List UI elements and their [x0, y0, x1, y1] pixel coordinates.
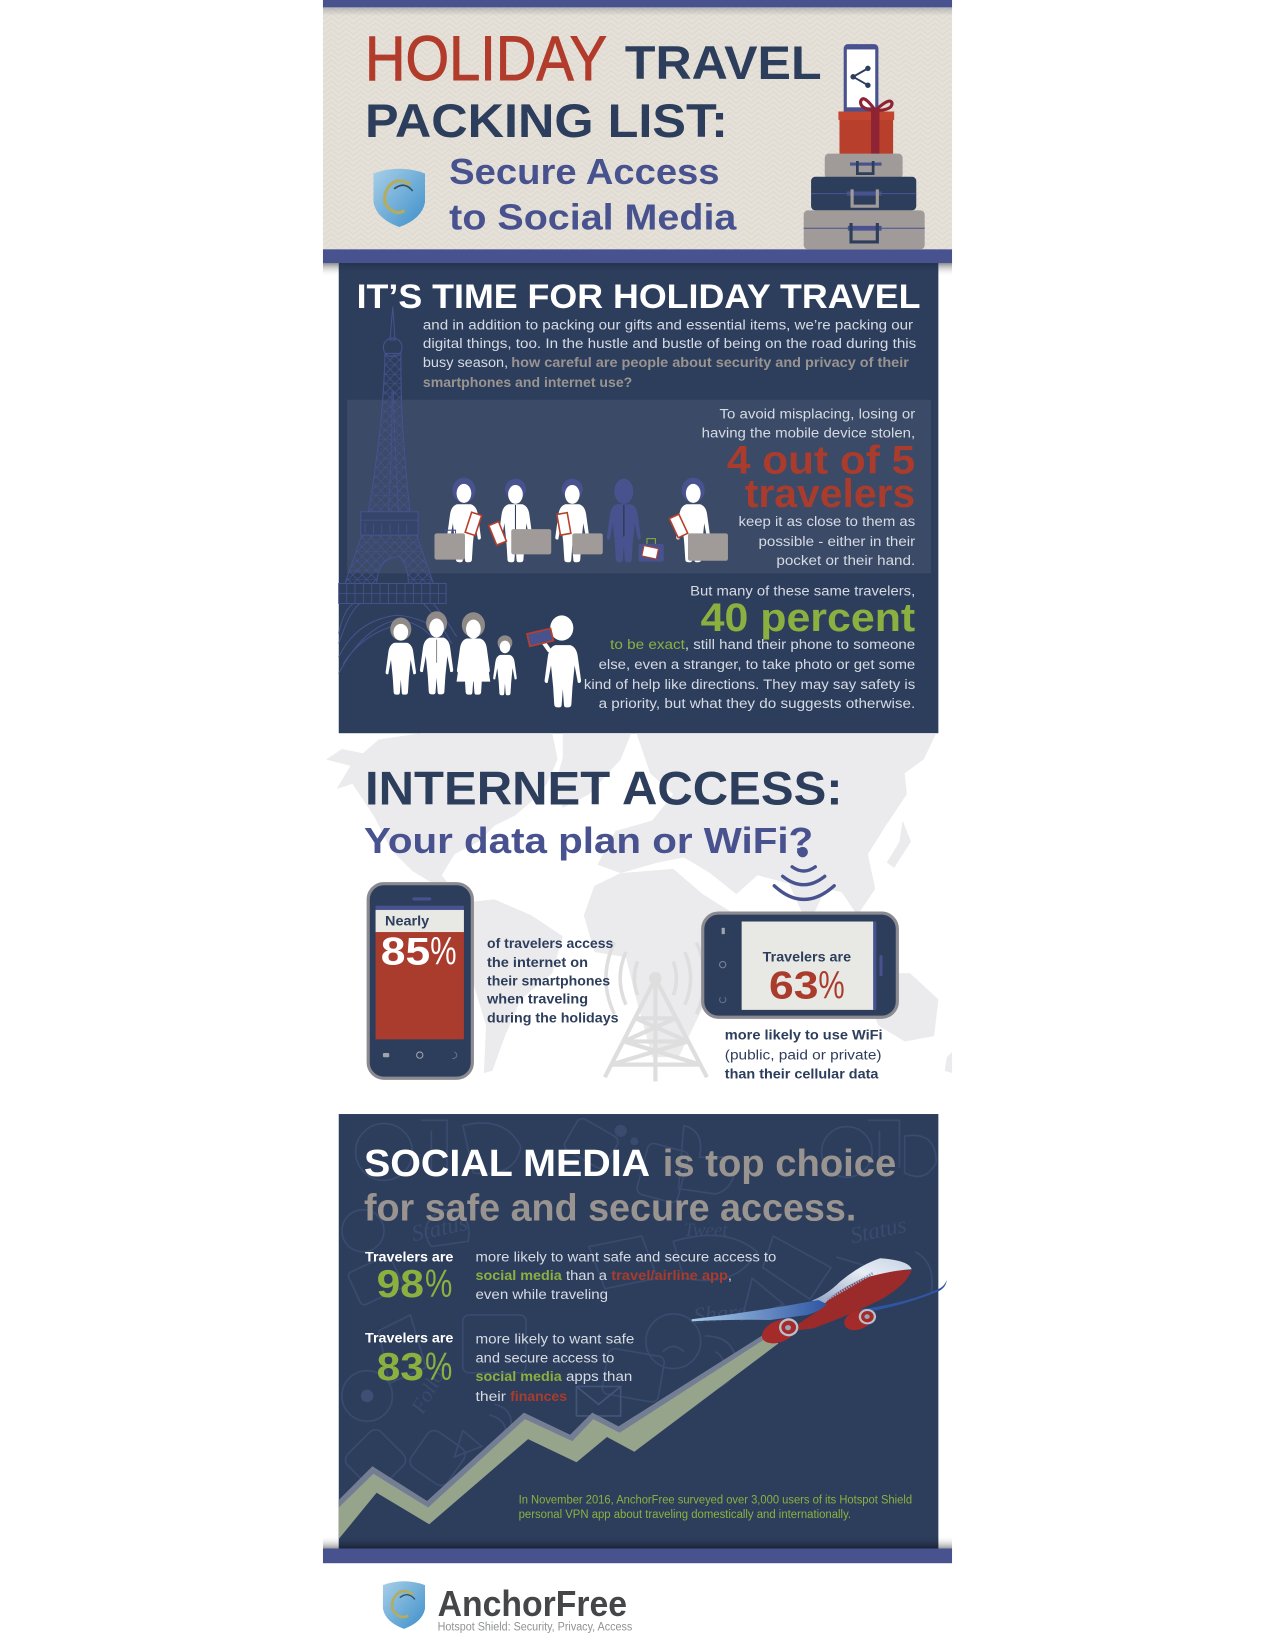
- heading: social media: for safe and secure access.: [364, 1187, 856, 1229]
- text: 4 out of 5 travelers: possible - either in their: [758, 533, 916, 549]
- text: 40 percent: a priority, but what they do suggests otherwise.: [599, 695, 915, 711]
- stat: 98%: than a: [566, 1267, 607, 1283]
- footer band: [323, 1548, 952, 1563]
- icon: wifi signal: [774, 847, 834, 899]
- text: 85 percent description: [486, 935, 619, 1026]
- text: 40 percent: else, even a stranger, to take photo or get some: [599, 656, 916, 672]
- title: holiday travel packing list: [365, 24, 822, 148]
- arrow trail of plane: [339, 1336, 778, 1539]
- world map background: [326, 733, 952, 1073]
- intro text: and in addition to packing our gifts and essential items, we’re packing our: [423, 316, 914, 332]
- stat: 98%: more likely to want safe and secure access to: [475, 1248, 777, 1264]
- stat: 98%: 98: [377, 1263, 424, 1306]
- text: 85 percent description: of travelers access: [487, 935, 614, 951]
- icon: family and person with phone: [386, 611, 581, 707]
- text: 4 out of 5 travelers: 4 out of 5: [727, 438, 915, 482]
- doodle words: Follow: [406, 1353, 455, 1418]
- icon: five travelers with luggage: [434, 478, 728, 562]
- stat: 83%: finances: [510, 1388, 567, 1404]
- text: 4 out of 5 travelers: keep it as close to them as: [738, 513, 915, 529]
- panel: it's time for holiday travel: [339, 263, 938, 733]
- icon: cell tower: [605, 943, 707, 1081]
- text: 40 percent: [584, 582, 916, 711]
- survey note: personal VPN app about traveling domestically and internationally.: [519, 1509, 851, 1521]
- shadows under the header band: [323, 263, 952, 277]
- text: 40 percent: to be exact: [610, 636, 685, 652]
- heading: social media: is top choice: [663, 1143, 896, 1185]
- subheading: Your data plan or WiFi?: [364, 821, 813, 861]
- stat: 83%: apps than: [566, 1368, 632, 1384]
- text: 63 percent description: than their cellular data: [725, 1065, 879, 1081]
- icon: portrait phone 85%: 85: [381, 931, 430, 974]
- stat: 83%: their: [475, 1388, 506, 1404]
- header panel: [323, 0, 952, 263]
- intro text: [423, 316, 916, 390]
- survey note: In November 2016, AnchorFree surveyed over 3,000 users of its Hotspot Shield: [519, 1494, 912, 1506]
- title: holiday travel packing list: HOLIDAY: [365, 24, 607, 94]
- text: 85 percent description: when traveling: [486, 991, 588, 1007]
- icon: airplane: [692, 1258, 947, 1348]
- text: 4 out of 5 travelers: [702, 406, 916, 568]
- footer logo: anchorfree: [383, 1581, 632, 1634]
- stat: 83%: social media: [475, 1368, 562, 1384]
- icon: eiffel tower: [339, 307, 457, 674]
- heading: IT’S TIME FOR HOLIDAY TRAVEL: [357, 278, 920, 316]
- text: 4 out of 5 travelers: pocket or their hand.: [776, 552, 915, 568]
- title: holiday travel packing list: TRAVEL: [625, 37, 822, 90]
- stat: 98%: %: [425, 1263, 452, 1306]
- panel: social media: [339, 1114, 947, 1548]
- icon: hotspot shield logo: [373, 169, 425, 227]
- doodle words: Tweet: [684, 1220, 728, 1241]
- text: 40 percent: But many of these same travelers,: [690, 582, 915, 598]
- icon: landscape phone 63%: [703, 913, 897, 1017]
- doodle words: Status: [409, 1210, 470, 1247]
- subtitle: Secure Access: [449, 152, 720, 192]
- doodle words: Status: [848, 1212, 909, 1249]
- intro text: how careful are people about security and privacy of their: [511, 354, 910, 370]
- icon: portrait phone 85%: %: [430, 931, 457, 974]
- icon: landscape phone 63%: %: [818, 964, 845, 1007]
- text: 4 out of 5 travelers: travelers: [745, 472, 915, 516]
- panel: internet access: [364, 763, 897, 1081]
- stat: 83%: [365, 1329, 635, 1404]
- stat: 83%: %: [425, 1346, 452, 1389]
- stat: 98%: Travelers are: [365, 1248, 454, 1264]
- text: 85 percent description: during the holidays: [487, 1010, 619, 1026]
- side shadows above footer band: [323, 1536, 952, 1548]
- stat: 98%: ,: [728, 1267, 732, 1283]
- icon: phone on gift and suitcases: [804, 44, 925, 249]
- icon: portrait phone 85%: [368, 884, 472, 1078]
- text: 40 percent: 40 percent: [701, 596, 915, 640]
- social doodles background: [342, 1116, 936, 1493]
- text: 40 percent: , still hand their phone to someone: [685, 636, 916, 652]
- stat: 98%: [365, 1248, 777, 1306]
- heading: social media: [364, 1143, 896, 1229]
- text: 85 percent description: their smartphones: [487, 973, 610, 989]
- heading: internet access: INTERNET ACCESS:: [365, 763, 843, 816]
- text: 63 percent description: [725, 1026, 883, 1081]
- footer logo: anchorfree: Hotspot Shield: Security, Privacy, Access: [438, 1620, 632, 1634]
- subtitle: [449, 152, 738, 237]
- stat: 98%: social media: [475, 1267, 562, 1283]
- subtitle: to Social Media: [449, 197, 738, 237]
- stat: 98%: even while traveling: [475, 1286, 608, 1302]
- text: 63 percent description: (public, paid or private): [725, 1046, 882, 1062]
- text: 4 out of 5 travelers: having the mobile device stolen,: [702, 425, 915, 441]
- doodle words: Share: [693, 1299, 748, 1329]
- text: 85 percent description: the internet on: [487, 954, 588, 970]
- text: 4 out of 5 travelers: To avoid misplacing, losing or: [720, 406, 916, 422]
- icon: portrait phone 85%: Nearly: [385, 913, 429, 929]
- doodle words: [406, 1210, 909, 1418]
- stat: 83%: Travelers are: [365, 1329, 454, 1345]
- icon: landscape phone 63%: 63: [769, 964, 818, 1007]
- icon: landscape phone 63%: Travelers are: [763, 948, 851, 964]
- intro text: busy season,: [423, 354, 508, 370]
- text: 40 percent: kind of help like directions. They may say safety is: [584, 676, 915, 692]
- intro text: smartphones and internet use?: [423, 374, 632, 390]
- heading: social media: SOCIAL MEDIA: [364, 1143, 650, 1185]
- text: 63 percent description: more likely to use WiFi: [725, 1026, 883, 1042]
- stat: 98%: travel/airline app: [611, 1267, 728, 1283]
- intro text: digital things, too. In the hustle and bustle of being on the road during this: [423, 335, 916, 351]
- stat: 83%: and secure access to: [475, 1349, 615, 1365]
- stat: 83%: 83: [377, 1346, 424, 1389]
- survey note: [519, 1494, 912, 1521]
- stat: 83%: more likely to want safe: [475, 1330, 635, 1346]
- title: holiday travel packing list: PACKING LIST:: [365, 95, 728, 148]
- footer logo: anchorfree: AnchorFree: [438, 1584, 627, 1624]
